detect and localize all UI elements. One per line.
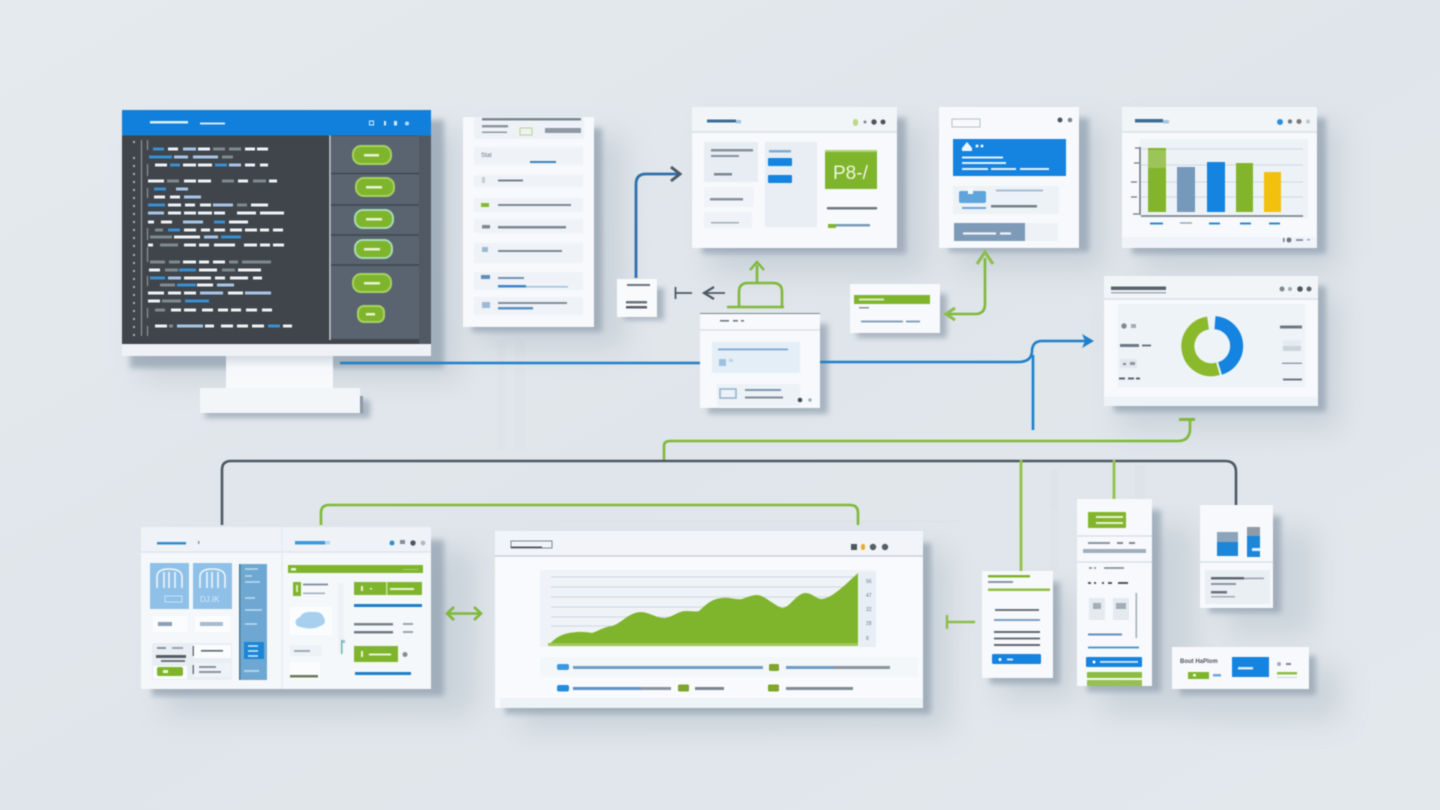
donut left legend (1119, 323, 1151, 380)
window title and controls (707, 119, 886, 126)
document header (474, 117, 584, 139)
mobile blue lines and buttons (1086, 634, 1142, 686)
chart axis labels: 32 (866, 607, 872, 613)
panel: small green banner card (850, 284, 940, 333)
donut header (1111, 286, 1312, 294)
blue tiles: DJ.IK (200, 595, 220, 604)
connector: blue arrow from small card to top panel (636, 167, 680, 278)
window title and controls (511, 541, 888, 550)
screen frame (122, 110, 431, 356)
area chart (540, 570, 875, 647)
panel: code editor monitor (122, 110, 431, 413)
panel: small note card (617, 279, 657, 317)
media row (953, 186, 1059, 214)
blue tiles (150, 563, 232, 609)
green tile: P8-/ (833, 163, 869, 184)
chart axis labels: 28 (866, 621, 872, 627)
small labelled buttons (153, 616, 230, 632)
blue images (1217, 527, 1260, 557)
panel: form with green tile (692, 107, 897, 248)
mobile image cards (1089, 593, 1137, 638)
monitor stand (200, 356, 363, 413)
arrow: green stop line (947, 615, 975, 629)
connector: green top bus (664, 418, 1195, 460)
chart legend rows (540, 657, 918, 692)
connector: dark bus (222, 461, 1247, 525)
panel: small status bar card: Bout HaPlom (1180, 659, 1218, 665)
panel: central process card (700, 313, 820, 408)
panel: donut chart (1104, 276, 1318, 406)
right panel details (290, 582, 422, 679)
panel: bar chart (1122, 107, 1317, 248)
panel: document list (463, 117, 594, 327)
panel: blue hero card (939, 107, 1079, 248)
slate action bar (954, 223, 1058, 241)
sidebar with green buttons (330, 135, 431, 344)
connector: blue main line to donut panel (340, 334, 1094, 430)
connector: green bracket over bottom panels (321, 505, 858, 525)
panel: bottom left dashboard (141, 527, 431, 689)
lower control group (152, 643, 232, 680)
blue title bar (122, 110, 431, 136)
text box (1205, 570, 1270, 604)
donut right legend (1280, 326, 1302, 380)
chart footer icons (1283, 238, 1310, 242)
centre column with blue buttons (765, 142, 817, 227)
connector: green drop lines (1021, 460, 1114, 573)
panel: small status bar card (1172, 647, 1309, 689)
arrow: green double arrow (447, 607, 481, 620)
blue banner (953, 139, 1066, 176)
chart title and controls (1135, 119, 1310, 125)
green header bar (288, 565, 423, 573)
connector: green arrow between card and blue panel (946, 252, 993, 320)
panel: text card with blue button (982, 571, 1053, 678)
mobile nav lines (1083, 542, 1146, 583)
list rows (474, 147, 583, 315)
donut (1188, 323, 1237, 370)
axis legend marks (1150, 222, 1280, 224)
bar chart plot (1131, 139, 1308, 218)
chart axis labels: 8 (866, 636, 869, 642)
chart axis labels (859, 572, 876, 647)
arrow: dark left arrow with stop bar (676, 287, 725, 299)
code area (122, 135, 431, 344)
chart axis labels: 47 (866, 593, 872, 599)
connector: green bracket arrow up (727, 262, 784, 307)
chart axis labels: 56 (866, 579, 872, 585)
panel: image and text card (1200, 505, 1273, 608)
mobile header tile (1088, 512, 1126, 528)
left form column (704, 142, 758, 228)
green tile (825, 150, 877, 189)
dashboard headers (157, 540, 425, 546)
right text lines (827, 207, 877, 228)
list rows: Stat (481, 153, 492, 159)
panel: area chart window (495, 531, 923, 708)
panel: tall mobile screen (1077, 499, 1152, 686)
blue side column (239, 564, 267, 680)
